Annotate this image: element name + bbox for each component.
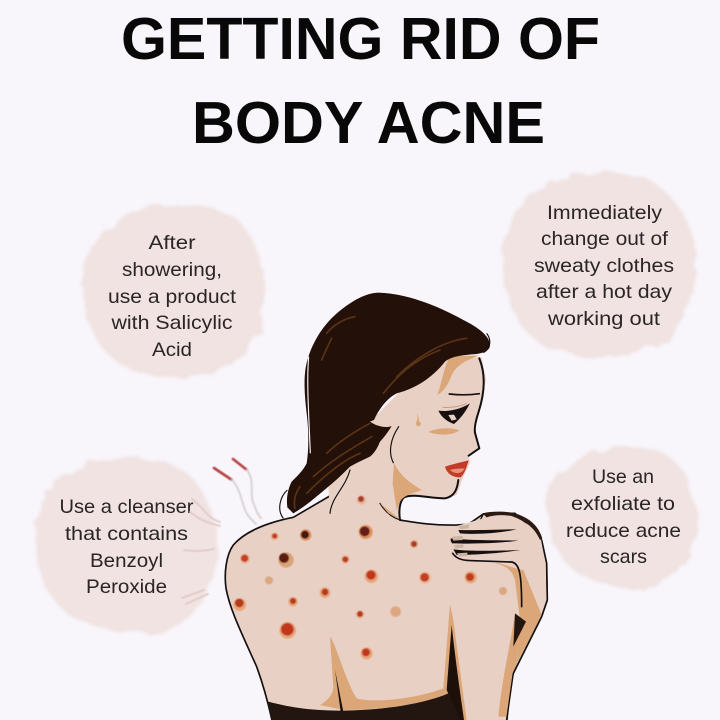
hair: [280, 293, 490, 518]
panel: salicylic acid tip: [82, 205, 265, 378]
title: BODY ACNE: [192, 90, 545, 156]
panel: exfoliate tip: scars: [600, 546, 647, 568]
illustration: woman with body acne: [225, 293, 547, 720]
panel: salicylic acid tip: use a product: [108, 286, 237, 308]
panel: salicylic acid tip: After: [148, 232, 196, 254]
panel: benzoyl peroxide tip: Use a cleanser: [60, 496, 194, 518]
panel: sweaty clothes tip: Immediately: [547, 202, 662, 224]
panel: sweaty clothes tip: after a hot day: [536, 281, 672, 303]
panel: benzoyl peroxide tip: that contains: [65, 523, 188, 545]
panel: salicylic acid tip: Acid: [152, 339, 192, 361]
acne spots: [233, 495, 507, 659]
panel: salicylic acid tip: showering,: [122, 259, 222, 281]
panel: exfoliate tip: Use an: [592, 466, 654, 488]
panel: sweaty clothes tip: sweaty clothes: [534, 255, 674, 277]
panel: exfoliate tip: exfoliate to: [571, 493, 675, 515]
panel: exfoliate tip: [548, 446, 697, 588]
face and neck: [328, 357, 486, 521]
title: GETTING RID OF: [121, 6, 600, 72]
panel: benzoyl peroxide tip: Benzoyl: [90, 550, 163, 572]
panel: sweaty clothes tip: change out of: [541, 228, 669, 250]
strapless top: [268, 613, 526, 720]
panel: salicylic acid tip: with Salicylic: [110, 312, 233, 334]
face features: [438, 394, 479, 477]
title: [121, 6, 600, 156]
panel: sweaty clothes tip: [502, 171, 697, 357]
back and arm: [225, 490, 547, 720]
panel: benzoyl peroxide tip: [36, 458, 218, 634]
hand on shoulder: [450, 512, 547, 720]
neck and forehead shadows: [320, 355, 542, 720]
icon: itch marks: [182, 459, 261, 604]
panel: sweaty clothes tip: working out: [547, 308, 661, 330]
panel: exfoliate tip: reduce acne: [566, 520, 681, 542]
panel: benzoyl peroxide tip: Peroxide: [86, 576, 167, 598]
